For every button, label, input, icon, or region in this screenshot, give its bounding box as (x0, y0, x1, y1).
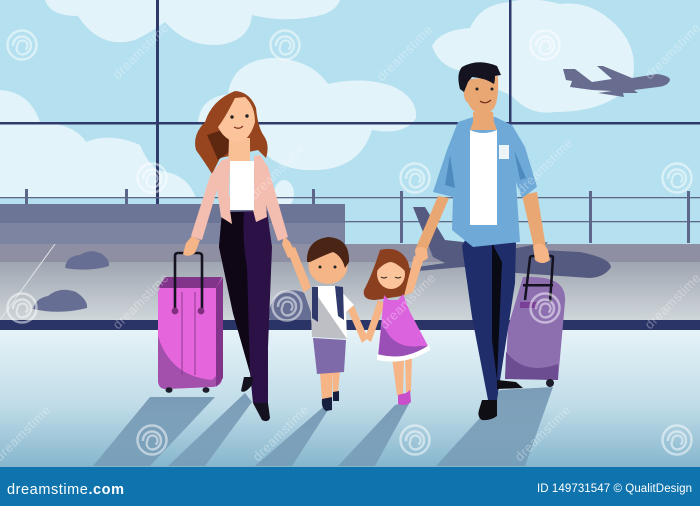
shirt (433, 117, 537, 247)
head (308, 248, 348, 284)
footer credit text: ID 149731547 © QualitDesign (537, 483, 692, 495)
sky background (0, 0, 700, 244)
terminal building (0, 204, 345, 244)
neck (470, 112, 497, 130)
shoes (398, 390, 411, 405)
watermark text: dreamstime (247, 140, 309, 202)
hair back (364, 249, 412, 300)
arms (183, 236, 200, 256)
hair (458, 62, 501, 92)
watermark text: dreamstime (514, 135, 576, 197)
hair back (195, 91, 268, 174)
legs (462, 225, 516, 400)
hair shadow (207, 128, 232, 160)
shirt folds (445, 150, 526, 188)
watermark text: dreamstime (110, 20, 172, 82)
white top (230, 161, 254, 210)
head (464, 76, 498, 115)
father (415, 62, 550, 420)
tarmac (0, 244, 700, 262)
window sill (0, 320, 700, 330)
window vertical frames (0, 0, 700, 322)
shorts (313, 338, 346, 374)
boy (287, 237, 368, 411)
watermark text: dreamstime (374, 22, 436, 84)
raised arm (404, 256, 424, 296)
shoes (322, 391, 339, 411)
watermark text: dreamstime (110, 270, 172, 332)
right arm (522, 192, 546, 248)
purple suitcase (505, 256, 565, 387)
watermark text: dreamstime (250, 402, 312, 464)
pink suitcase (158, 253, 223, 393)
airplane in sky (563, 66, 670, 97)
legs (392, 356, 412, 395)
dress frill (377, 345, 430, 362)
white t-shirt (470, 130, 497, 225)
shoes (478, 400, 497, 420)
clouds (0, 0, 634, 208)
watermark text: dreamstime (377, 270, 439, 332)
trousers (219, 211, 272, 403)
fence (0, 189, 700, 243)
backpack straps (312, 286, 344, 322)
pocket card (499, 145, 509, 159)
mother (183, 91, 296, 421)
left arm (415, 196, 449, 252)
shoes (253, 403, 270, 421)
dress (378, 294, 428, 358)
neck (228, 138, 256, 170)
lowering arm (347, 304, 368, 343)
fringe (376, 253, 406, 272)
watermark text: dreamstime (512, 402, 574, 464)
floor shadows (93, 387, 553, 466)
trouser shadow (492, 243, 502, 380)
jacket (191, 155, 288, 241)
face (377, 259, 405, 289)
t-shirt (304, 286, 354, 339)
raised arm (287, 247, 311, 293)
footer logo text: dreamstime.com (7, 482, 124, 498)
face (218, 97, 255, 143)
hair (307, 237, 349, 268)
girl (364, 249, 430, 405)
bottom bar (0, 467, 700, 506)
plane on ground shadow (407, 207, 611, 278)
hands (415, 244, 550, 263)
legs (320, 370, 340, 400)
rocks on tarmac (33, 251, 312, 320)
lowering arm (365, 300, 385, 342)
floor (0, 330, 700, 467)
